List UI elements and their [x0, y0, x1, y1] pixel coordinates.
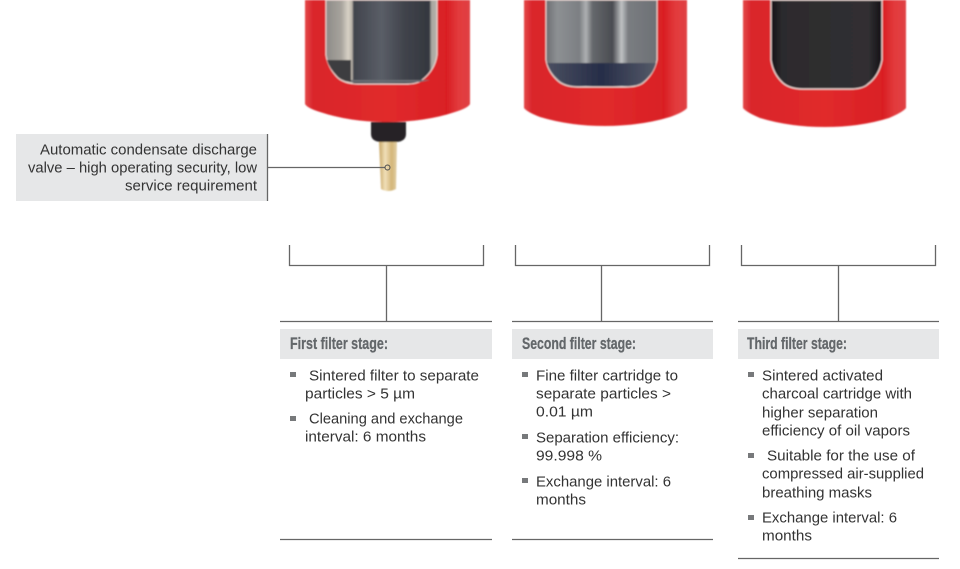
- panel: first filter stage: particles > 5 µm: [305, 386, 415, 402]
- panel: second filter stage: 99.998 %: [536, 448, 602, 464]
- panel: second filter stage: Separation efficiency:: [536, 430, 679, 446]
- panel: first filter stage: Sintered filter to separate: [309, 368, 479, 384]
- panel: second filter stage: Fine filter cartridge to: [536, 368, 678, 384]
- panel: first filter stage: interval: 6 months: [305, 428, 426, 446]
- panel: second filter stage: months: [536, 492, 586, 508]
- panel: first filter stage: Cleaning and exchange: [309, 410, 463, 428]
- callout: automatic condensate discharge valve: [16, 134, 390, 201]
- panel: second filter stage: Exchange interval: 6: [536, 474, 671, 490]
- heading: first filter stage: First filter stage:: [290, 335, 388, 353]
- filter housing: third stage: [743, 0, 906, 127]
- heading: third filter stage: Third filter stage:: [747, 335, 847, 353]
- panel: third filter stage: months: [762, 528, 812, 544]
- callout: automatic condensate discharge valve: valve – high operating security, low: [28, 160, 257, 176]
- panel: third filter stage: efficiency of oil vapors: [762, 422, 910, 440]
- panel: second filter stage: 0.01 µm: [536, 404, 593, 420]
- panel: third filter stage: compressed air-supplied: [762, 466, 924, 482]
- filter housing: first stage with discharge valve: [305, 0, 470, 191]
- panel: second filter stage: [512, 245, 713, 540]
- panel: third filter stage: charcoal cartridge with: [762, 386, 912, 402]
- callout: automatic condensate discharge valve: Automatic condensate discharge: [40, 142, 257, 158]
- heading: second filter stage: Second filter stage:: [522, 335, 636, 353]
- panel: second filter stage: separate particles >: [536, 386, 671, 402]
- filter housing: second stage: [524, 0, 687, 126]
- panel: third filter stage: breathing masks: [762, 484, 872, 502]
- icon: condensate discharge valve: [371, 122, 406, 191]
- panel: first filter stage: [280, 245, 492, 540]
- panel: third filter stage: Suitable for the use of: [767, 448, 916, 464]
- panel: third filter stage: Sintered activated: [762, 368, 883, 384]
- panel: third filter stage: higher separation: [762, 404, 878, 422]
- callout: automatic condensate discharge valve: service requirement: [125, 178, 258, 194]
- panel: third filter stage: Exchange interval: 6: [762, 510, 897, 526]
- panel: third filter stage: [738, 245, 939, 558]
